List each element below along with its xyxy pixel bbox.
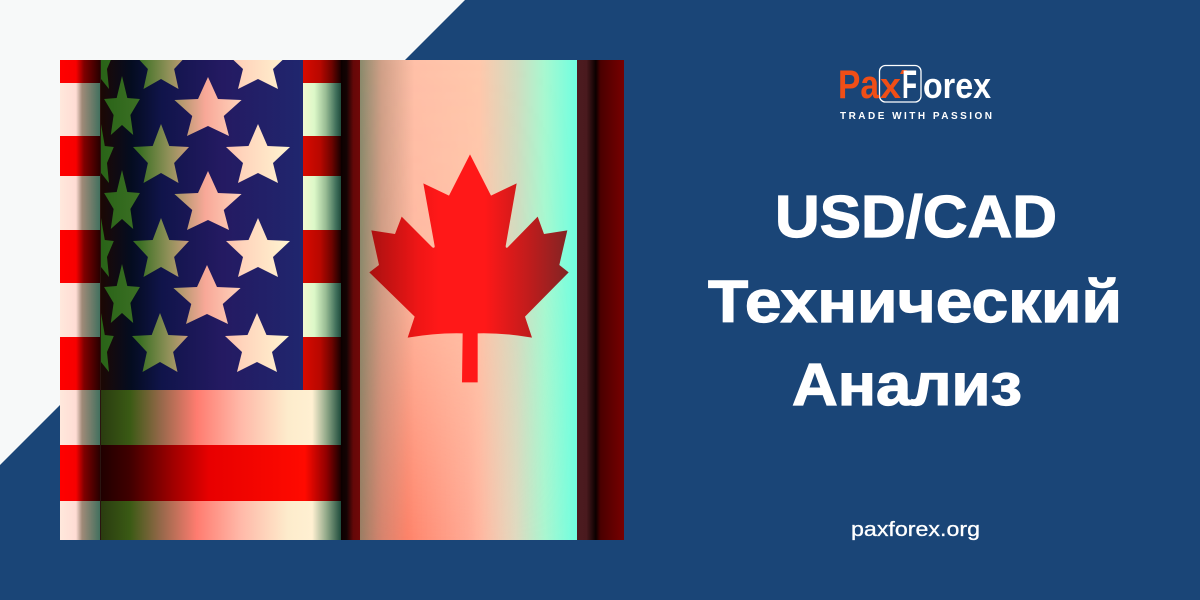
website url: paxforex.org (851, 519, 980, 541)
title: Анализ (792, 352, 1022, 418)
logo tagline: TRADE WITH PASSION (840, 111, 992, 122)
panel: US flag (60, 60, 341, 540)
logo wordmark: Pa (838, 63, 880, 107)
flags image (60, 60, 624, 540)
icon: maple leaf (369, 154, 569, 382)
stars (101, 60, 290, 372)
panel: Canada flag (341, 60, 624, 540)
title: Технический (708, 269, 1122, 335)
logo: PaxForex: orex (923, 65, 991, 106)
white corner triangle (0, 0, 465, 465)
logo: PaxForex (838, 63, 992, 122)
canton (101, 60, 303, 390)
title: USD/CAD (775, 184, 1057, 250)
logo mark box (880, 66, 921, 102)
title (708, 184, 1122, 418)
logo: PaxForex: x (880, 65, 901, 106)
logo: PaxForex: F (902, 63, 917, 107)
